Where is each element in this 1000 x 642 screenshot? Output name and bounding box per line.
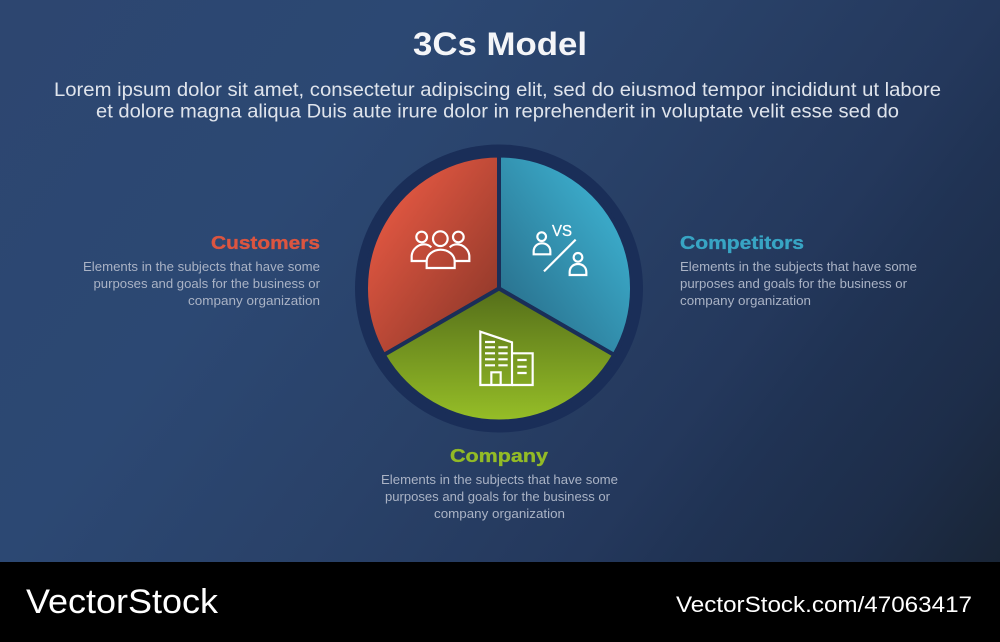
icon: versus: [534, 223, 586, 275]
text block: customers: [83, 259, 321, 308]
text block: company: company organization: [434, 506, 565, 521]
intro paragraph: [54, 79, 941, 122]
footer bar: [0, 562, 1000, 642]
icon: versus: VS: [552, 223, 572, 240]
text block: customers: Elements in the subjects that have some: [83, 259, 320, 274]
segment: company: [384, 288, 614, 422]
text block: competitors: [680, 259, 917, 308]
text block: company: [381, 472, 618, 521]
panel: customers: [83, 232, 321, 308]
text block: competitors: company organization: [680, 293, 811, 308]
footer url: VectorStock.com/47063417: [676, 592, 972, 617]
text block: competitors: Elements in the subjects that have some: [680, 259, 917, 274]
icon: building: [480, 332, 533, 385]
intro paragraph: et dolore magna aliqua Duis aute irure dolor in reprehenderit in voluptate velit esse sed do: [96, 100, 899, 122]
panel: competitors: [680, 232, 917, 308]
outer ring: [355, 144, 643, 432]
title: 3Cs Model: [413, 26, 587, 62]
icon: customers group: [412, 231, 469, 268]
text block: customers: company organization: [188, 293, 320, 308]
text block: company: Elements in the subjects that have some: [381, 472, 618, 487]
footer logo: VectorStock: [26, 583, 219, 621]
heading: competitors: Competitors: [680, 232, 804, 253]
panel: company: [381, 445, 618, 521]
segment: customers: [366, 156, 499, 355]
intro paragraph: Lorem ipsum dolor sit amet, consectetur adipiscing elit, sed do eiusmod tempor incididunt ut labore: [54, 79, 941, 101]
text block: company: purposes and goals for the business or: [385, 489, 611, 504]
heading: customers: Customers: [211, 232, 320, 253]
text block: customers: purposes and goals for the business or: [94, 276, 321, 291]
segment: competitors: [499, 156, 632, 355]
pie chart: [355, 144, 643, 432]
heading: company: Company: [450, 445, 549, 466]
text block: competitors: purposes and goals for the business or: [680, 276, 908, 291]
